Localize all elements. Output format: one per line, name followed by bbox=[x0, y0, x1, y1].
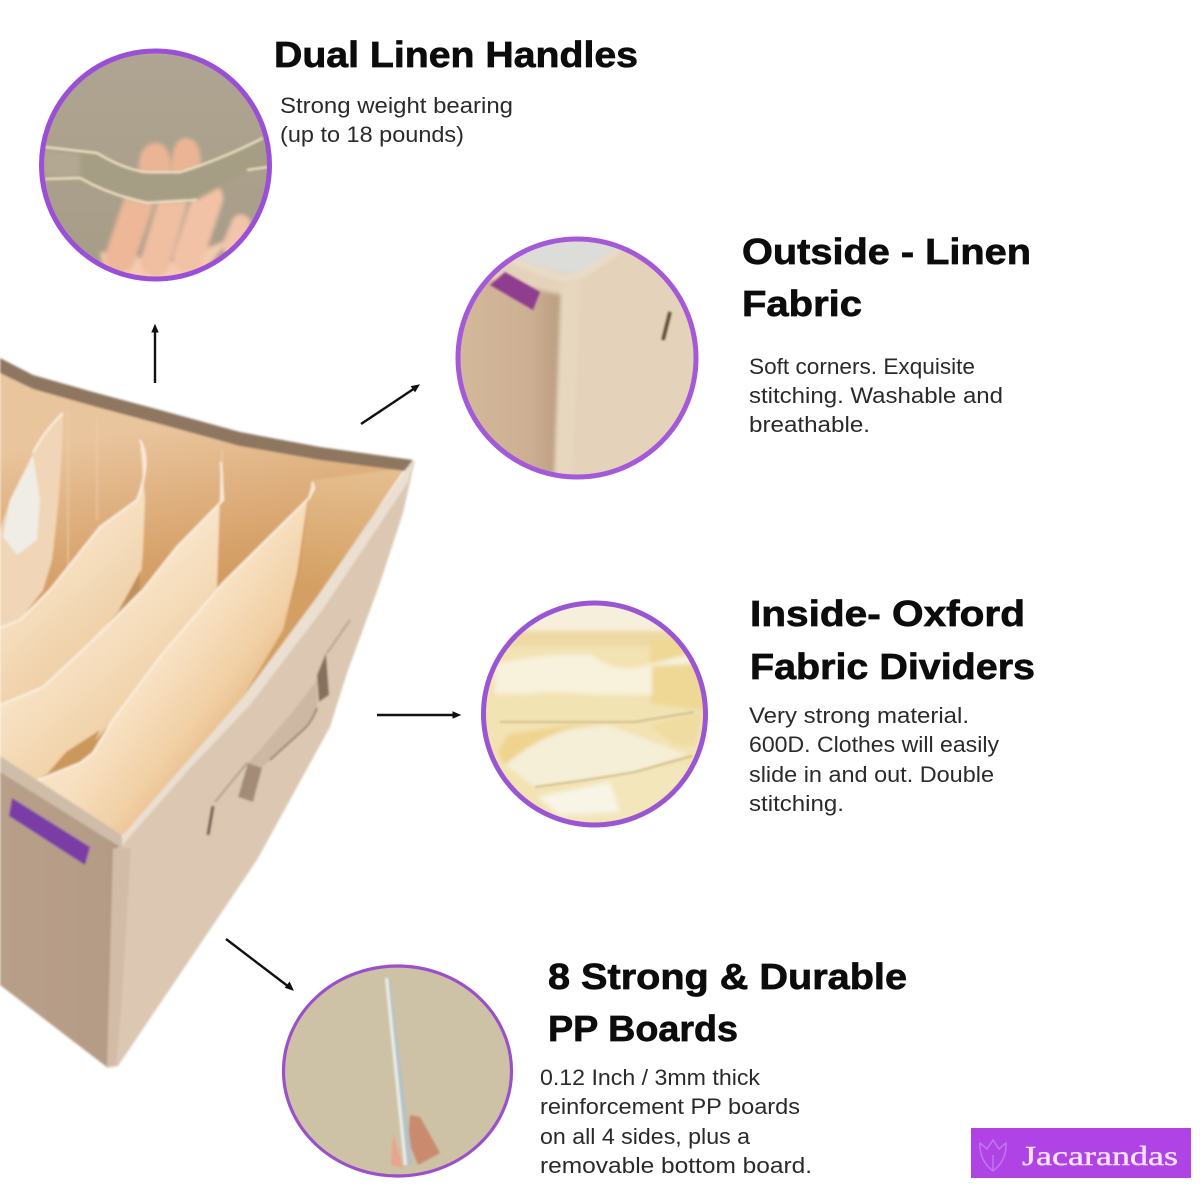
text: inside description: slide in and out. Double bbox=[749, 762, 994, 787]
side rim bbox=[118, 460, 414, 850]
circle: PP boards photo bbox=[284, 966, 512, 1176]
right box wall bbox=[649, 640, 703, 712]
arrow: to PP boards bbox=[226, 939, 293, 990]
heading: outside linen fabric: Fabric bbox=[742, 283, 862, 324]
product photo: storage box bbox=[0, 358, 415, 1068]
corner strip bbox=[552, 293, 566, 474]
white divider top bbox=[495, 654, 692, 695]
handle slit line bbox=[327, 620, 350, 653]
left finger bbox=[391, 1133, 403, 1168]
palm bbox=[98, 240, 225, 276]
circle: dual linen handles photo bbox=[40, 50, 275, 292]
circle: outside linen fabric photo bbox=[450, 230, 705, 485]
text: outside description bbox=[749, 354, 1003, 437]
darker left panel bbox=[460, 278, 562, 472]
circle: inside oxford dividers photo bbox=[480, 600, 710, 830]
stitching lines bbox=[500, 712, 694, 787]
fingertips behind strap bbox=[139, 138, 200, 175]
white interior bbox=[518, 242, 617, 274]
heading: inside oxford dividers bbox=[750, 593, 1035, 687]
finger four bbox=[232, 224, 241, 246]
arrow: to outside fabric bbox=[361, 385, 419, 424]
heading: PP boards: PP Boards bbox=[548, 1008, 738, 1049]
box left outer face bbox=[0, 762, 122, 1068]
dark handle opening bbox=[317, 653, 329, 702]
top cream band bbox=[524, 606, 665, 632]
text: PP boards description: on all 4 sides, plus a bbox=[540, 1124, 751, 1149]
text: inside description: stitching. bbox=[749, 791, 844, 816]
heading: outside linen fabric bbox=[742, 231, 1031, 324]
heading: inside oxford dividers: Fabric Dividers bbox=[750, 646, 1035, 687]
middle divider bbox=[534, 690, 584, 696]
strap edge bbox=[270, 708, 317, 760]
handle strap bbox=[124, 164, 220, 205]
text: handles description: Strong weight bearing bbox=[280, 93, 513, 118]
arrow: to handles bbox=[152, 325, 158, 383]
lower right wall bbox=[653, 713, 701, 745]
heading: outside linen fabric: Outside - Linen bbox=[742, 231, 1031, 272]
text: outside description: stitching. Washable and bbox=[749, 383, 1003, 408]
tan band bbox=[511, 633, 673, 646]
text: handles description: (up to 18 pounds) bbox=[280, 122, 464, 147]
box interior bbox=[0, 368, 405, 835]
divider 1 bbox=[0, 440, 145, 706]
divider 0 with white lining bbox=[0, 413, 63, 628]
icon: jacaranda flower bbox=[980, 1140, 1006, 1171]
corner seam bbox=[107, 848, 131, 1066]
finger one bbox=[120, 205, 138, 258]
text: inside description: 600D. Clothes will easily bbox=[749, 732, 999, 757]
slit bbox=[663, 312, 670, 340]
divider 3 bbox=[33, 482, 314, 835]
logo wordmark: Jacarandas bbox=[1022, 1141, 1178, 1171]
finger two bbox=[155, 205, 172, 262]
text: PP boards description bbox=[540, 1065, 812, 1178]
handle strap bbox=[248, 680, 317, 768]
rear rim bbox=[0, 358, 413, 471]
heading: dual linen handles: Dual Linen Handles bbox=[274, 34, 638, 75]
lower divider bbox=[505, 725, 688, 787]
PP board bbox=[385, 978, 413, 1165]
purple label bbox=[9, 798, 90, 865]
lower slit bbox=[215, 763, 247, 802]
heading: PP boards bbox=[548, 956, 907, 1049]
box right outer face bbox=[107, 460, 415, 1068]
board edge bbox=[385, 978, 407, 1165]
bottom divider bbox=[535, 762, 688, 822]
text: outside description: Soft corners. Exquisite bbox=[749, 354, 975, 379]
text: handles description bbox=[280, 93, 513, 147]
right finger bbox=[408, 1115, 440, 1165]
label bbox=[490, 272, 540, 310]
white lining bbox=[3, 455, 40, 555]
handle patch bbox=[238, 763, 262, 802]
text: PP boards description: reinforcement PP boards bbox=[540, 1094, 800, 1119]
arrow: to inside dividers bbox=[377, 712, 460, 718]
front rim bbox=[0, 756, 122, 848]
heading: inside oxford dividers: Inside- Oxford bbox=[750, 593, 1025, 634]
white bottom part bbox=[538, 782, 620, 815]
strap piping bbox=[45, 138, 268, 203]
heading: PP boards: 8 Strong & Durable bbox=[548, 956, 907, 997]
divider highlights bbox=[0, 413, 314, 782]
divider 2 bbox=[0, 462, 223, 782]
text: inside description bbox=[749, 703, 999, 816]
side handle bbox=[208, 620, 350, 835]
text: PP boards description: removable bottom board. bbox=[540, 1153, 812, 1178]
text: inside description: Very strong material. bbox=[749, 703, 969, 728]
right interior wall bbox=[180, 468, 405, 770]
divider 2 shadow gap bbox=[48, 730, 100, 773]
finger three bbox=[188, 198, 208, 258]
divider 1 shadow gap bbox=[100, 570, 141, 632]
logo: Jacarandas bbox=[971, 1128, 1191, 1178]
text: outside description: breathable. bbox=[749, 412, 870, 437]
back wall fold lines bbox=[68, 410, 222, 565]
text: PP boards description: 0.12 Inch / 3mm thick bbox=[540, 1065, 761, 1090]
rim bbox=[508, 250, 620, 279]
lower tan wedge bbox=[498, 725, 600, 765]
strap end patch bbox=[44, 151, 80, 176]
